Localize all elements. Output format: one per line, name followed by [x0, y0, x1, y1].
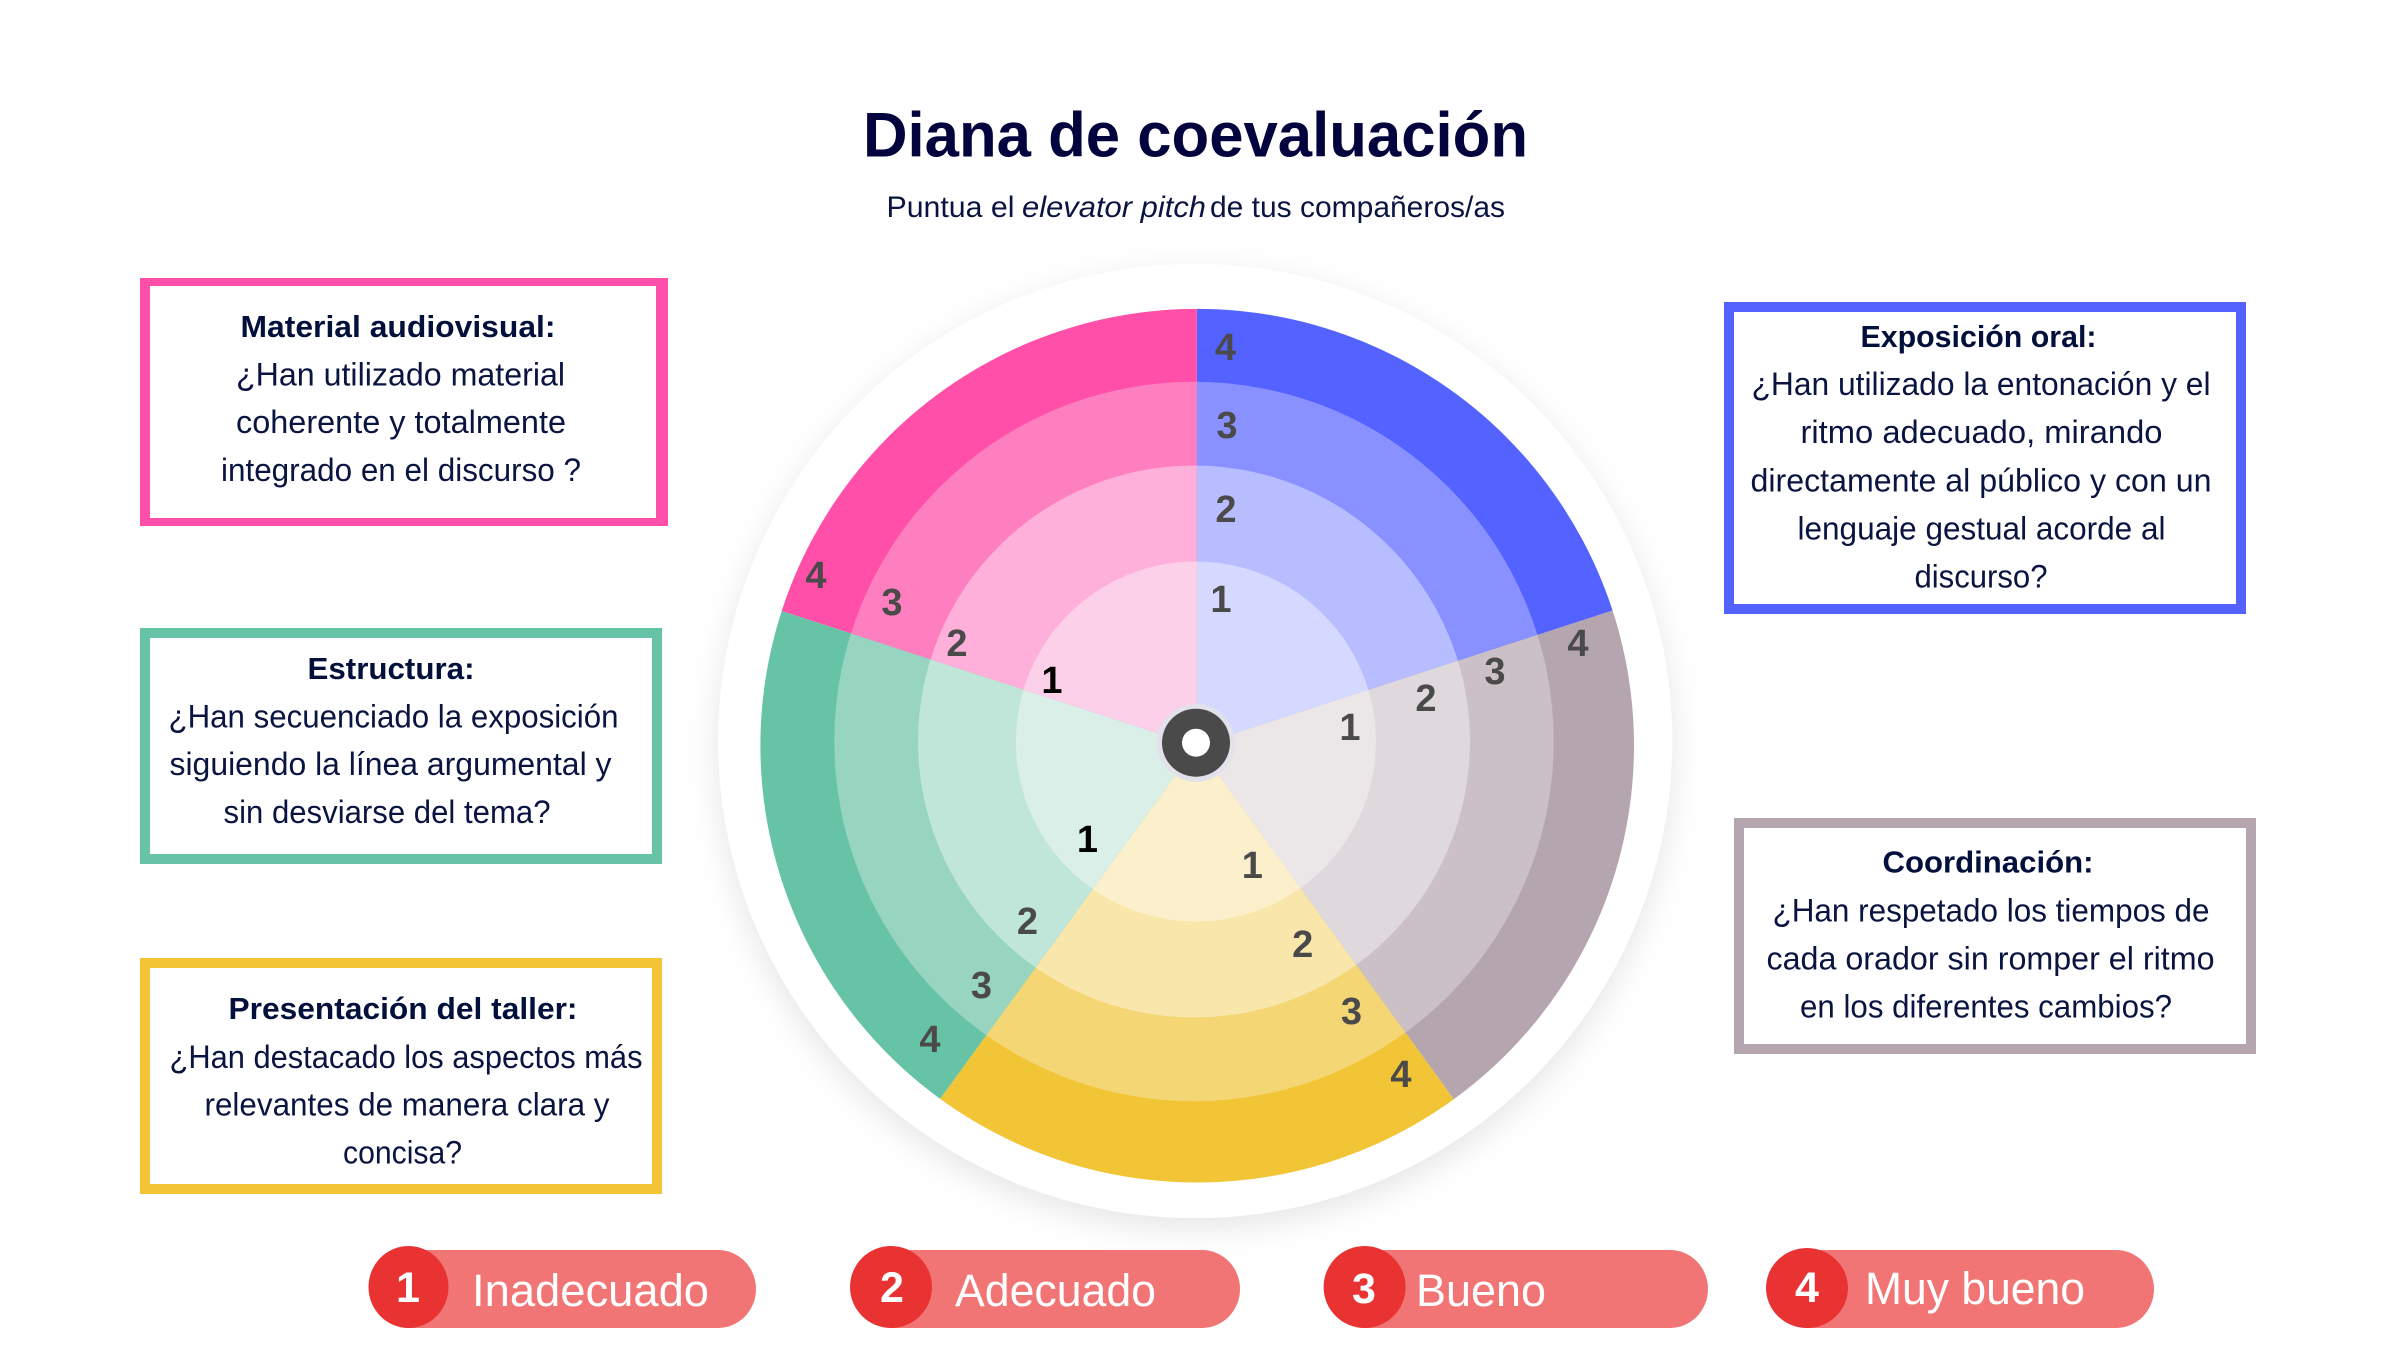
legend — [368, 1246, 2154, 1328]
legend item: 3 Bueno: 3 — [1352, 1265, 1376, 1313]
panel: coordinación — [1734, 818, 2256, 1054]
panel: material audiovisual: integrado en el discurso ? — [221, 452, 581, 488]
panel: estructura: Estructura: — [308, 651, 474, 686]
panel: presentación del taller: concisa? — [343, 1134, 462, 1170]
scores: pink segment: 1 — [1041, 660, 1063, 702]
panel: estructura: sin desviarse del tema? — [224, 794, 550, 830]
scores: blue segment: 1 — [1210, 579, 1232, 621]
legend item: 1 Inadecuado — [368, 1246, 756, 1328]
panel: presentación del taller: Presentación del taller: — [228, 991, 578, 1026]
scores: pink segment — [805, 555, 1063, 702]
panel: material audiovisual: Material audiovisual: — [240, 309, 556, 344]
scores: yellow segment: 1 — [1242, 845, 1263, 887]
legend item: 2 Adecuado: Adecuado — [955, 1265, 1156, 1316]
legend item: 2 Adecuado — [850, 1246, 1240, 1328]
scores: taupe segment: 3 — [1484, 651, 1506, 693]
segment: coordinación (taupe) — [1218, 610, 1634, 1100]
legend item: 3 Bueno: Bueno — [1416, 1265, 1546, 1316]
scores: green segment: 1 — [1077, 819, 1098, 861]
white backing disc — [718, 264, 1672, 1218]
legend item: 4 Muy bueno — [1766, 1248, 2154, 1328]
segment: material audiovisual (pink) — [782, 308, 1197, 734]
scores: blue segment: 3 — [1216, 405, 1238, 447]
panel: exposición oral: Exposición oral: — [1860, 319, 2096, 354]
scores: yellow segment: 4 — [1390, 1054, 1412, 1096]
panel: coordinación: Coordinación: — [1882, 844, 2094, 880]
panel: exposición oral — [1724, 302, 2246, 614]
panel: coordinación: en los diferentes cambios? — [1800, 988, 2172, 1024]
scores: pink segment: 3 — [881, 582, 903, 624]
panel: estructura: siguiendo la línea argumental y — [170, 746, 612, 782]
subtitle — [886, 191, 1505, 224]
dartboard — [718, 264, 1672, 1218]
panel: exposición oral: directamente al público y con un — [1750, 462, 2212, 498]
legend item: 1 Inadecuado: Inadecuado — [472, 1265, 709, 1316]
scores: taupe segment — [1339, 623, 1589, 749]
scores: green segment — [919, 819, 1098, 1061]
scores: yellow segment: 3 — [1341, 991, 1362, 1033]
panel: presentación del taller: relevantes de manera clara y — [204, 1086, 610, 1122]
scores: yellow segment — [1242, 845, 1412, 1096]
scores: taupe segment: 4 — [1567, 623, 1589, 665]
centre hub — [1157, 704, 1235, 782]
panel: material audiovisual — [140, 278, 668, 526]
segment: presentación del taller (yellow) — [940, 775, 1454, 1182]
panel: presentación del taller — [140, 958, 662, 1194]
legend item: 3 Bueno — [1324, 1246, 1708, 1328]
scores: green segment: 4 — [919, 1019, 941, 1061]
scores: green segment: 2 — [1017, 901, 1038, 943]
segment: exposición oral (blue) — [1196, 308, 1612, 734]
scores: taupe segment: 2 — [1415, 678, 1437, 720]
scores: green segment: 3 — [971, 965, 992, 1007]
panel: estructura — [140, 628, 662, 864]
panel: coordinación: cada orador sin romper el ritmo — [1766, 940, 2214, 976]
legend item: 4 Muy bueno: Muy bueno — [1865, 1263, 2085, 1314]
panel: estructura: ¿Han secuenciado la exposición — [168, 698, 618, 734]
panel: exposición oral: ritmo adecuado, mirando — [1800, 414, 2162, 450]
panel: material audiovisual: coherente y totalmente — [236, 404, 566, 440]
scores: blue segment — [1210, 327, 1238, 621]
scores: yellow segment: 2 — [1292, 924, 1313, 966]
panel: presentación del taller: ¿Han destacado los aspectos más — [170, 1039, 642, 1075]
title: Diana de coevaluación — [863, 100, 1528, 170]
segment: estructura (green) — [760, 610, 1175, 1099]
subtitle: Puntua el — [886, 191, 1014, 224]
panel: coordinación: ¿Han respetado los tiempos de — [1772, 892, 2210, 928]
scores: blue segment: 2 — [1215, 489, 1237, 531]
scores: taupe segment: 1 — [1339, 707, 1361, 749]
scores: blue segment: 4 — [1215, 327, 1236, 369]
legend item: 4 Muy bueno: 4 — [1795, 1264, 1819, 1312]
legend item: 1 Inadecuado: 1 — [396, 1264, 420, 1312]
panel: material audiovisual: ¿Han utilizado material — [236, 356, 565, 392]
legend item: 2 Adecuado: 2 — [880, 1264, 904, 1312]
subtitle: elevator pitch — [1022, 191, 1206, 224]
panel: exposición oral: discurso? — [1914, 558, 2048, 594]
scores: pink segment: 4 — [805, 555, 827, 597]
panel: exposición oral: ¿Han utilizado la entonación y el — [1752, 366, 2210, 402]
scores: pink segment: 2 — [946, 623, 968, 665]
panel: exposición oral: lenguaje gestual acorde al — [1798, 510, 2166, 546]
subtitle: de tus compañeros/as — [1210, 191, 1505, 224]
